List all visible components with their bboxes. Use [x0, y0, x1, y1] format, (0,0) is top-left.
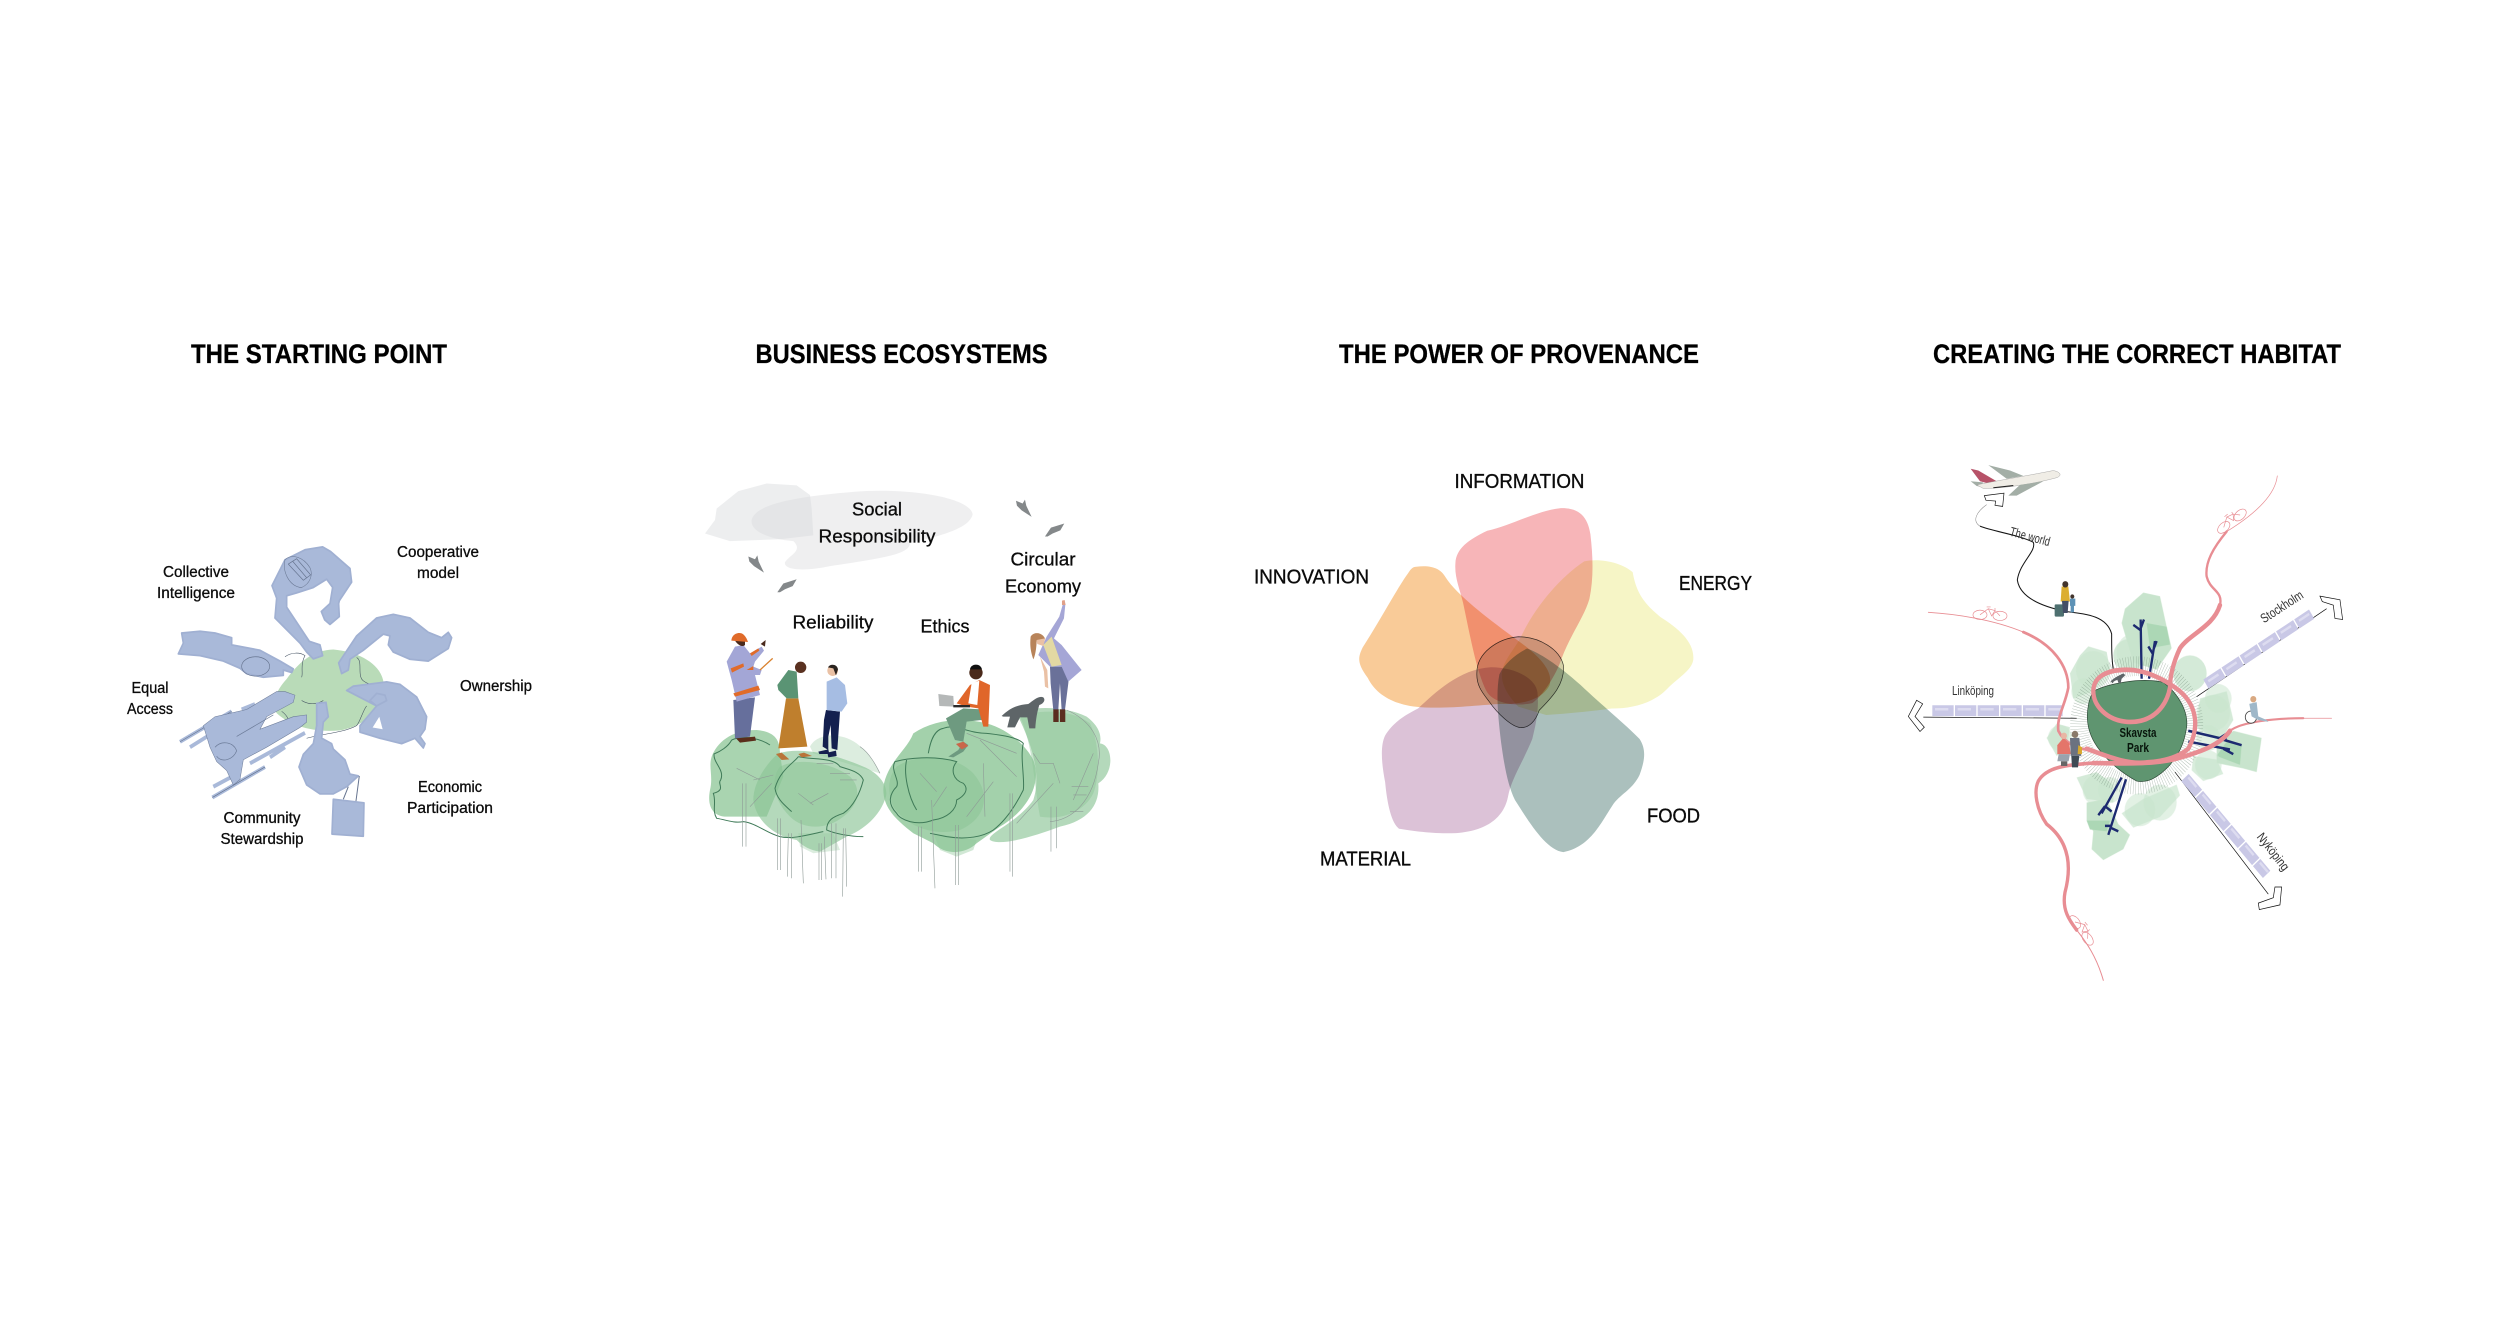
- thin grey branches and trunks: [737, 710, 1099, 897]
- tree outlines: [713, 727, 1024, 838]
- pink cycle routes: [1928, 476, 2332, 980]
- panel: starting point illustration: [178, 547, 452, 836]
- bike icons: [1973, 503, 2248, 947]
- petal: energy: [1502, 560, 1693, 715]
- label: INFORMATION: INFORMATION: [1454, 471, 1584, 493]
- label: FOOD: FOOD: [1647, 806, 1700, 828]
- arrow: Linköping: [1908, 700, 1924, 732]
- label: Collective Intelligence: Collective: [163, 564, 229, 581]
- dog: [1002, 697, 1044, 728]
- label: ENERGY: ENERGY: [1679, 573, 1752, 595]
- person: top with backpack: [272, 547, 352, 659]
- label: Cooperative model: model: [417, 565, 459, 582]
- wheelchair user: [2245, 696, 2268, 723]
- label: Economic Participation: Economic: [418, 779, 482, 796]
- arrow: Stockholm: [2320, 596, 2343, 620]
- label: INNOVATION: INNOVATION: [1254, 566, 1369, 588]
- label: Equal Access: [127, 680, 173, 718]
- person: in wheelchair: [180, 692, 307, 797]
- label: Cooperative model: [397, 544, 479, 582]
- label: Cooperative model: Cooperative: [397, 544, 479, 561]
- person: worker in hard hat: [727, 633, 773, 743]
- label: Circular Economy: [1005, 548, 1082, 596]
- person: woman reaching up: [1030, 600, 1082, 722]
- label: Skavsta Park: Skavsta: [2120, 725, 2157, 740]
- tree canopy washes: [709, 708, 1110, 857]
- elderly couple: [2057, 731, 2082, 767]
- label: Circular Economy: Economy: [1005, 576, 1082, 596]
- label: Stockholm: Stockholm: [2258, 587, 2306, 626]
- park: Skavsta Park: [2087, 680, 2187, 781]
- petal: food: [1497, 649, 1644, 852]
- label: Community Stewardship: Community: [224, 810, 301, 827]
- person: seated man with laptop: [938, 665, 990, 757]
- train: Nyköping: [2185, 777, 2268, 874]
- dog on park rim: [2111, 673, 2125, 683]
- plane: [1971, 465, 2060, 496]
- person: reaching from top right: [339, 614, 452, 674]
- label: Collective Intelligence: Intelligence: [157, 585, 235, 602]
- petal: material: [1382, 667, 1538, 833]
- panel: habitat map: [1908, 465, 2343, 980]
- label: Nyköping: Nyköping: [2254, 830, 2293, 874]
- dark blue trunks: [2098, 620, 2242, 835]
- label: Economic Participation: [407, 779, 493, 817]
- label: Ethics: Ethics: [920, 616, 970, 636]
- person: right: [347, 682, 427, 748]
- label: Equal Access: Access: [127, 701, 173, 718]
- title: creating the correct habitat: CREATING THE CORRECT HABITAT: [1933, 339, 2341, 369]
- traveller with child and suitcase: [2055, 581, 2075, 617]
- label: Community Stewardship: [220, 810, 304, 848]
- panel: trees with people: [709, 600, 1110, 897]
- route to the world: [1976, 505, 2113, 670]
- person: man in blue shirt: [818, 665, 847, 757]
- light green tree canopies: [2047, 593, 2262, 860]
- train: Linköping: [1932, 709, 2063, 711]
- green shared table: [274, 650, 384, 731]
- panel: clouds and birds: [705, 483, 1064, 592]
- label: Skavsta Park: Park: [2127, 740, 2150, 755]
- label: Linköping: Linköping: [1952, 683, 1994, 698]
- petal: information: [1455, 508, 1593, 704]
- title: business ecosystems: BUSINESS ECOSYSTEMS: [756, 339, 1048, 369]
- label: Social Responsibility: Responsibility: [818, 526, 936, 546]
- label: Social Responsibility: Social: [852, 498, 902, 520]
- arrow: Nyköping: [2258, 887, 2282, 910]
- title: the starting point: THE STARTING POINT: [191, 339, 447, 369]
- label: Economic Participation: Participation: [407, 800, 493, 817]
- train: Stockholm: [2206, 612, 2312, 684]
- person: upper left: [178, 631, 293, 677]
- label: Ownership: Ownership: [460, 678, 532, 695]
- title: the power of provenance: THE POWER OF PROVENANCE: [1339, 339, 1699, 369]
- person: woman in skirt: [776, 662, 812, 760]
- label: Circular Economy: Circular: [1010, 548, 1076, 570]
- label: Community Stewardship: Stewardship: [220, 831, 304, 848]
- label: MATERIAL: MATERIAL: [1320, 848, 1411, 870]
- chart: five overlapping petals: [1359, 508, 1693, 852]
- petal: innovation: [1359, 566, 1550, 708]
- label: Reliability: Reliability: [792, 612, 874, 632]
- grass ring: [2079, 666, 2194, 785]
- label: The world: The world: [2008, 524, 2052, 549]
- cloud front: [752, 491, 973, 569]
- rail lines: [1923, 609, 2327, 894]
- arrow: to the world: [1984, 493, 2004, 506]
- centre overlap shape: [1477, 637, 1564, 728]
- label: Collective Intelligence: [157, 564, 235, 602]
- label: Equal Access: Equal: [132, 680, 168, 697]
- cloud back: [705, 483, 813, 541]
- birds: [748, 500, 1064, 592]
- label: Social Responsibility: [818, 498, 936, 546]
- table outline strokes: [282, 653, 383, 738]
- label: Skavsta Park: [2120, 725, 2157, 755]
- person: with suitcase: [299, 702, 364, 836]
